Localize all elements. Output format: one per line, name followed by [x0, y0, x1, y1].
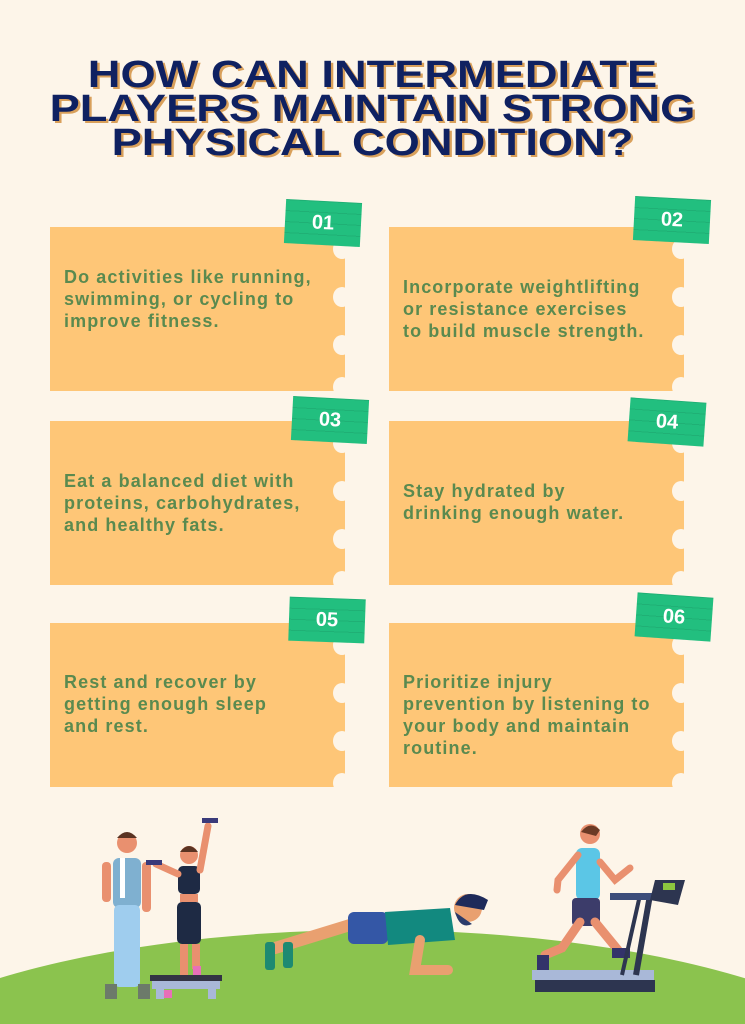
- text 3: [64, 471, 300, 535]
- text 6: your body and maintain: [403, 716, 630, 736]
- title: HOW CAN INTERMEDIATE: [88, 54, 657, 96]
- tag 05: 05: [315, 609, 339, 631]
- card 2: [389, 227, 684, 391]
- runner on treadmill: [532, 824, 685, 992]
- text 2: [403, 277, 645, 341]
- text 1: improve fitness.: [64, 311, 220, 331]
- text 4: drinking enough water.: [403, 503, 624, 523]
- woman with dumbbells: [146, 818, 218, 998]
- title: PHYSICAL CONDITION?: [112, 122, 633, 164]
- card 1: [50, 227, 345, 391]
- green hill: [0, 930, 745, 1024]
- tag 06: [635, 592, 713, 642]
- text 1: Do activities like running,: [64, 267, 312, 287]
- text 4: Stay hydrated by: [403, 481, 566, 501]
- text 2: to build muscle strength.: [403, 321, 645, 341]
- text 6: [403, 672, 651, 758]
- tag 04: [628, 397, 706, 447]
- card 4: [389, 421, 684, 585]
- card 6: [389, 623, 684, 787]
- text 2: or resistance exercises: [403, 299, 627, 319]
- tag 03: [291, 396, 369, 444]
- text 3: Eat a balanced diet with: [64, 471, 294, 491]
- title: [50, 54, 695, 164]
- text 3: and healthy fats.: [64, 515, 225, 535]
- text 6: Prioritize injury: [403, 672, 553, 692]
- tag 01: [284, 199, 362, 247]
- step platform: [150, 975, 222, 999]
- illustration: exercising people on hill: [0, 818, 745, 1024]
- text 4: [403, 481, 624, 523]
- tag 01: 01: [311, 211, 335, 235]
- card 5: [50, 623, 345, 787]
- trainer man: [102, 832, 151, 999]
- text 5: getting enough sleep: [64, 694, 267, 714]
- text 5: [64, 672, 267, 736]
- tag 02: [633, 196, 711, 244]
- tag 05: [288, 597, 366, 643]
- tag 06: 06: [662, 605, 686, 629]
- text 3: proteins, carbohydrates,: [64, 493, 300, 513]
- text 1: [64, 267, 312, 331]
- tag 03: 03: [318, 408, 342, 432]
- text 1: swimming, or cycling to: [64, 289, 294, 309]
- card 3: [50, 421, 345, 585]
- title: PLAYERS MAINTAIN STRONG: [50, 88, 695, 130]
- text 2: Incorporate weightlifting: [403, 277, 640, 297]
- text 6: routine.: [403, 738, 478, 758]
- plank man: [265, 894, 488, 970]
- tag 02: 02: [660, 208, 684, 232]
- text 5: and rest.: [64, 716, 149, 736]
- text 6: prevention by listening to: [403, 694, 651, 714]
- tag 04: 04: [655, 410, 679, 434]
- text 5: Rest and recover by: [64, 672, 257, 692]
